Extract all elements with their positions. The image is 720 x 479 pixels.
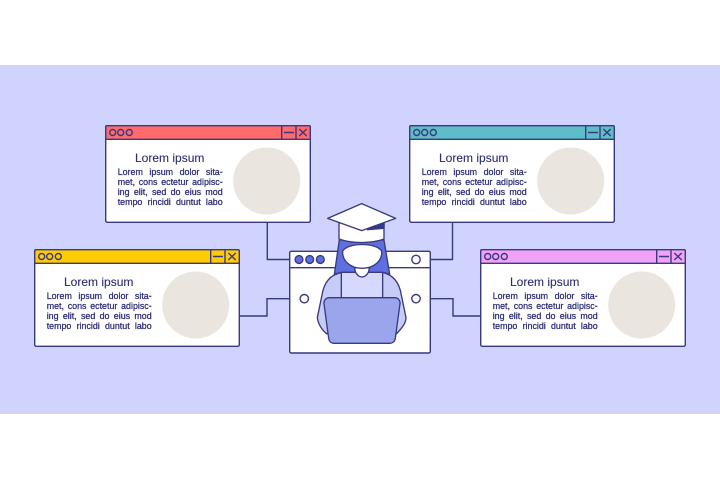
- torso: [341, 272, 383, 300]
- body text: [492, 291, 598, 332]
- text: red window: [118, 151, 223, 208]
- connector: pink window to centre: [420, 299, 481, 316]
- body text: met, cons ectetur adipisc-: [47, 301, 152, 311]
- body text: [422, 167, 527, 208]
- neck: [355, 268, 369, 277]
- window frame: red: [106, 126, 310, 222]
- body text: met, cons ectetur adipisc-: [118, 177, 223, 187]
- body text: ing elit, sed do eius mod: [422, 187, 527, 197]
- background band: [0, 65, 720, 414]
- window frame: pink: [481, 250, 685, 346]
- heading: Lorem ipsum: [64, 275, 133, 289]
- text: teal window: [422, 151, 527, 208]
- body text: Lorem ipsum dolor sita-: [493, 291, 598, 301]
- shoulders and arms: [317, 272, 406, 334]
- body text: Lorem ipsum dolor sita-: [422, 167, 527, 177]
- body text: met, cons ectetur adipisc-: [422, 177, 527, 187]
- heading: Lorem ipsum: [439, 151, 508, 165]
- body text: ing elit, sed do eius mod: [493, 311, 598, 321]
- body text: Lorem ipsum dolor sita-: [47, 291, 152, 301]
- body text: tempo rincidi duntut labo: [47, 321, 152, 331]
- body text: tempo rincidi duntut labo: [422, 197, 527, 207]
- connector: yellow window to centre: [240, 299, 300, 316]
- body text: tempo rincidi duntut labo: [493, 321, 598, 331]
- central browser window: [290, 251, 430, 353]
- heading: Lorem ipsum: [135, 151, 204, 165]
- text: pink window: [492, 275, 598, 332]
- body text: tempo rincidi duntut labo: [118, 197, 223, 207]
- text: yellow window: [46, 275, 152, 332]
- graduate figure: [317, 204, 406, 343]
- body text: Lorem ipsum dolor sita-: [118, 167, 223, 177]
- cap shadow: [367, 223, 384, 230]
- connector: teal window to centre: [420, 222, 452, 260]
- hair: [334, 240, 390, 274]
- window frame: yellow: [35, 250, 239, 346]
- face: [343, 244, 382, 268]
- connector: red window to centre: [267, 222, 290, 260]
- mortarboard: [328, 204, 396, 231]
- laptop: [324, 298, 400, 343]
- body text: met, cons ectetur adipisc-: [493, 301, 598, 311]
- body text: [118, 167, 223, 208]
- cap base: [339, 223, 384, 242]
- window frame: teal: [410, 126, 614, 222]
- heading: Lorem ipsum: [510, 275, 579, 289]
- body text: ing elit, sed do eius mod: [47, 311, 152, 321]
- body text: ing elit, sed do eius mod: [118, 187, 223, 197]
- body text: [46, 291, 152, 332]
